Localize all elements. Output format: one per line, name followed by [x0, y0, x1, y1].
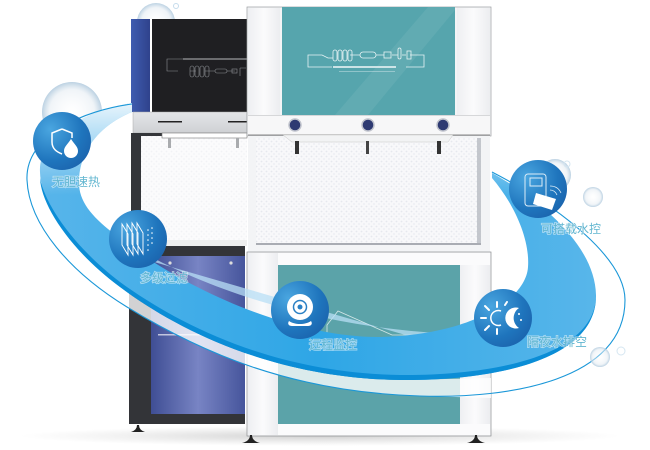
- perforated white panel: [141, 136, 247, 240]
- tray and taps: [162, 133, 247, 138]
- lower cabinet: [129, 246, 245, 424]
- bubble: right: [583, 187, 603, 207]
- bubble: behind card icon: [539, 159, 571, 191]
- label: 隔夜水排空: [527, 334, 587, 349]
- brand line on black panel: [183, 58, 247, 60]
- label: 可搭载水控: [541, 222, 601, 236]
- circuit logo: [308, 48, 424, 67]
- dark frame: [131, 133, 247, 246]
- ribbon thin outer line: [27, 104, 625, 396]
- logo brand line: [333, 66, 396, 68]
- feature: remote monitoring: [271, 281, 357, 352]
- bubble: large behind left icon: [42, 82, 102, 142]
- feature: card water control: [509, 160, 601, 236]
- perforated water panel: [248, 136, 490, 252]
- circuit logo on black panel: [167, 59, 246, 77]
- bubble: tiny top right: [564, 161, 570, 167]
- icon: card reader: [509, 160, 567, 218]
- ribbon dark edge: [40, 178, 596, 380]
- solid ribbon body: [40, 103, 596, 380]
- foot: [131, 425, 145, 432]
- blue lower panel: [151, 256, 245, 414]
- teal lower panel: [278, 265, 460, 424]
- feature: multi-stage filtration: [109, 210, 188, 285]
- left dispenser: [129, 19, 247, 432]
- teal glass panel: [282, 7, 455, 115]
- ribbon swoosh: [27, 103, 625, 398]
- feature: no-tank fast heating: [33, 112, 100, 189]
- tray: [283, 135, 453, 142]
- bubble: top behind machine: [137, 3, 175, 41]
- right dispenser: [242, 7, 491, 443]
- icon: filter layers: [109, 210, 167, 268]
- left dispenser upper body: [131, 19, 247, 113]
- black display panel: [152, 19, 247, 112]
- translucent white band below ribbon: [120, 287, 491, 398]
- blue side strip: [131, 19, 150, 112]
- control band with buttons: [248, 115, 490, 135]
- bubble: small top: [174, 4, 178, 8]
- floor shadow: [20, 426, 620, 446]
- icon: shield and water drop: [33, 112, 91, 170]
- bubble: lower right: [590, 347, 610, 367]
- label: 多级过滤: [140, 271, 188, 285]
- feature: overnight water drain: [474, 289, 587, 349]
- bubble: tiny lower right: [617, 347, 625, 355]
- icon: webcam: [271, 281, 329, 339]
- taps: [295, 141, 299, 154]
- ribbon top fade: [40, 103, 596, 380]
- label: 远程监控: [309, 337, 357, 352]
- upper housing: [247, 7, 491, 136]
- translucent upper sliver: [113, 233, 440, 345]
- lower housing: [247, 252, 491, 436]
- silver control band: [133, 112, 247, 133]
- icon: sun and moon: [474, 289, 532, 347]
- feet: [242, 435, 260, 443]
- label: 无胆速热: [52, 175, 100, 189]
